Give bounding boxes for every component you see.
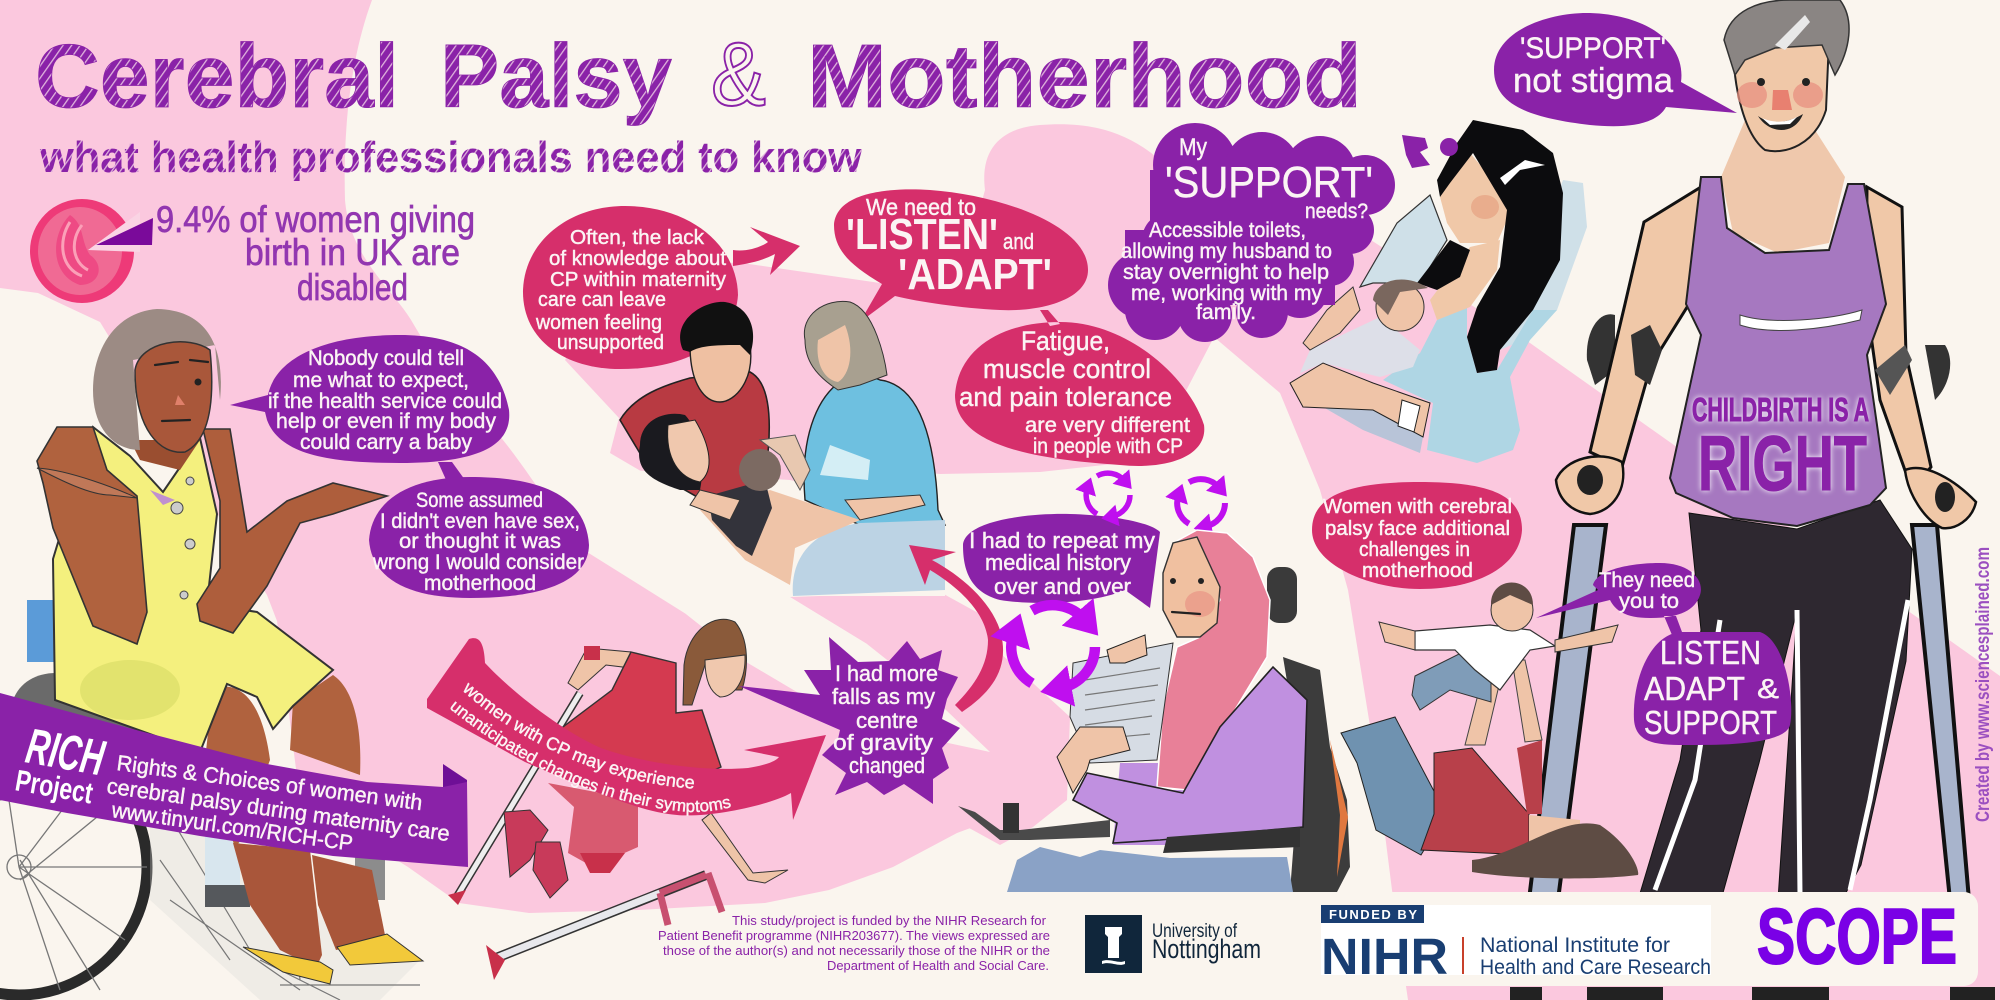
speech bubble: fatigue — [955, 310, 1204, 466]
speech bubble: women with cerebral palsy — [1312, 482, 1522, 589]
starburst: I had more falls — [739, 637, 960, 804]
starburst: I had more falls: falls as my — [832, 684, 935, 709]
speech bubble: listen adapt and support: ADAPT — [1644, 670, 1745, 707]
vertical credit: Created by www.sciencesplained.com — [1973, 547, 1994, 822]
speech bubble: fatigue: are very different — [1025, 414, 1190, 437]
logo: NIHR: FUNDED BY — [1329, 907, 1417, 922]
starburst: I had more falls: of gravity — [833, 730, 933, 755]
illustration: mother sleeping with baby in bed — [1290, 120, 1587, 463]
starburst: I had more falls: changed — [849, 753, 925, 778]
speech bubble: often the lack: Often, the lack — [570, 227, 705, 249]
speech bubble: often the lack: unsupported — [557, 332, 664, 354]
funding disclaimer: This study/project is funded by the NIHR Research for — [732, 914, 1046, 928]
speech bubble: some assumed: or thought it was — [399, 530, 561, 553]
speech bubble: fatigue: in people with CP — [1033, 435, 1183, 458]
thought cloud: my support needs: Accessible toilets, — [1149, 219, 1306, 242]
speech bubble: we need to listen and adapt — [834, 189, 1088, 322]
speech bubble: nobody could tell me: could carry a baby — [300, 431, 472, 454]
thought cloud: my support needs: 'SUPPORT' — [1165, 158, 1373, 207]
illustration: birth scene with partner and midwife — [620, 301, 945, 596]
belly text: childbirth is a right: RIGHT — [1698, 419, 1867, 507]
speech bubble: they need you to: They need — [1599, 569, 1695, 592]
thought cloud: my support needs: stay overnight to help — [1123, 261, 1329, 284]
starburst: I had more falls: centre — [856, 708, 918, 733]
banner: RICH project — [0, 693, 468, 867]
banner: RICH project: Project — [13, 764, 95, 810]
funding disclaimer: Department of Health and Social Care. — [827, 959, 1049, 973]
speech bubble: nobody could tell me: me what to expect, — [293, 369, 469, 392]
statistic text: birth in UK are — [245, 232, 460, 273]
illustration: woman in wheelchair shrugging — [0, 309, 423, 1000]
thought cloud: my support needs: My — [1179, 134, 1207, 161]
speech bubble: listen adapt and support: SUPPORT — [1644, 704, 1777, 741]
title — [35, 25, 1362, 127]
funding disclaimer: Patient Benefit programme (NIHR203677). The views expressed are — [658, 929, 1050, 943]
logo: University of Nottingham: Nottingham — [1152, 934, 1261, 964]
logo: NIHR: NIHR — [1321, 928, 1448, 985]
speech bubble: often the lack — [523, 206, 738, 369]
speech bubble: we need to listen and adapt: and — [1003, 229, 1034, 254]
speech bubble: we need to listen and adapt: 'LISTEN' — [846, 210, 998, 259]
logo: University of Nottingham — [1085, 915, 1261, 973]
speech bubble: we need to listen and adapt: We need to — [866, 194, 976, 220]
icon: large circular arrows — [1001, 605, 1100, 695]
subtitle: what health professionals need to know — [39, 133, 863, 182]
speech bubble: some assumed: motherhood — [424, 572, 536, 595]
statistic text — [156, 199, 475, 308]
logo: NIHR — [1321, 905, 1711, 985]
starburst: I had more falls: I had more — [835, 661, 938, 686]
logo: University of Nottingham: University of — [1152, 921, 1238, 942]
speech bubble: women with cerebral palsy: motherhood — [1362, 560, 1473, 582]
funding disclaimer: those of the author(s) and not necessarily those of the NIHR or the — [663, 944, 1050, 958]
illustration: fallen crutch — [486, 873, 722, 980]
statistic text: 9.4% of women giving — [156, 199, 475, 240]
speech bubble: often the lack: care can leave — [538, 289, 666, 311]
speech bubble: repeat my medical history — [963, 514, 1160, 608]
funding disclaimer — [658, 914, 1050, 973]
illustration: parent lying on floor lifting child — [1341, 582, 1638, 878]
speech bubble: support not stigma — [1494, 13, 1737, 126]
speech bubble: women with cerebral palsy: palsy face additional — [1325, 518, 1510, 540]
speech bubble: some assumed: wrong I would consider — [372, 551, 584, 574]
speech bubble: some assumed — [369, 477, 589, 598]
title: Motherhood — [807, 27, 1362, 127]
arrow: often to listen — [733, 227, 800, 275]
speech bubble: nobody could tell me — [230, 335, 509, 482]
speech bubble: nobody could tell me: Nobody could tell — [308, 347, 464, 370]
illustration: woman falling with crutch — [448, 619, 788, 905]
banner: RICH project: Rights & Choices of women with — [115, 750, 424, 815]
speech bubble: often the lack: of knowledge about — [549, 248, 726, 270]
arrow banner: women with CP may experience — [427, 638, 826, 820]
banner: RICH project: cerebral palsy during maternity care — [105, 773, 451, 846]
speech bubble: listen adapt and support: & — [1757, 673, 1779, 704]
thought cloud: my support needs: needs? — [1305, 200, 1368, 223]
belly text: childbirth is a right — [1692, 391, 1869, 507]
speech bubble: women with cerebral palsy: Women with cerebral — [1323, 496, 1512, 518]
speech bubble: nobody could tell me: if the health service could — [268, 390, 502, 413]
speech bubble: some assumed: I didn't even have sex, — [380, 510, 580, 533]
thought cloud: my support needs: family. — [1196, 301, 1256, 324]
speech bubble: support not stigma: 'SUPPORT' — [1520, 32, 1666, 65]
curved arrow: falls to birth scene — [909, 545, 1003, 712]
illustration: woman in hijab with medical notes in powerchair — [958, 530, 1350, 892]
speech bubble: repeat my medical history: over and over — [994, 574, 1131, 599]
thought cloud: my support needs — [1108, 123, 1458, 342]
speech bubble: often the lack: CP within maternity — [550, 269, 726, 291]
icon: small circular arrows right — [1171, 479, 1228, 531]
speech bubble: listen adapt and support — [1634, 632, 1791, 745]
thought cloud: my support needs: me, working with my — [1131, 282, 1322, 305]
thought cloud: my support needs: allowing my husband to — [1121, 240, 1332, 263]
title: & — [711, 25, 766, 125]
illustration: standing pregnant woman with crutches — [1529, 0, 1976, 900]
icon: small circular arrows left — [1081, 473, 1132, 520]
speech bubble: we need to listen and adapt: 'ADAPT' — [898, 250, 1052, 299]
banner: RICH project: www.tinyurl.com/RICH-CP — [109, 797, 354, 856]
arrow banner: women with CP may experience: unanticipated changes in their symptoms — [450, 701, 731, 816]
speech bubble: they need you to: you to — [1619, 590, 1679, 613]
speech bubble: support not stigma: not stigma — [1513, 62, 1673, 100]
statistic text: disabled — [297, 267, 408, 308]
speech bubble: they need you to — [1536, 563, 1701, 635]
speech bubble: repeat my medical history: I had to repeat my — [969, 528, 1155, 553]
speech bubble: often the lack: women feeling — [535, 312, 662, 334]
arrow banner: women with CP may experience: women with CP may experience — [464, 682, 694, 789]
speech bubble: listen adapt and support: LISTEN — [1660, 634, 1761, 671]
speech bubble: women with cerebral palsy: challenges in — [1359, 539, 1470, 561]
speech bubble: nobody could tell me: help or even if my body — [276, 410, 496, 433]
title: Cerebral — [35, 27, 399, 127]
speech bubble: some assumed: Some assumed — [416, 489, 543, 512]
footer strip background — [1000, 892, 1995, 1000]
speech bubble: repeat my medical history: medical history — [985, 550, 1131, 575]
title: Palsy — [440, 27, 672, 127]
speech bubble: fatigue: Fatigue, — [1021, 326, 1110, 356]
banner: RICH project: RICH — [22, 718, 109, 786]
belly text: childbirth is a right: CHILDBIRTH IS A — [1692, 391, 1869, 428]
logo: NIHR: National Institute for — [1480, 934, 1670, 957]
speech bubble: fatigue: and pain tolerance — [959, 382, 1172, 412]
speech bubble: fatigue: muscle control — [983, 354, 1151, 384]
pie chart: 9.4% with fetus icon — [30, 199, 153, 303]
logo: NIHR: Health and Care Research — [1480, 956, 1711, 979]
